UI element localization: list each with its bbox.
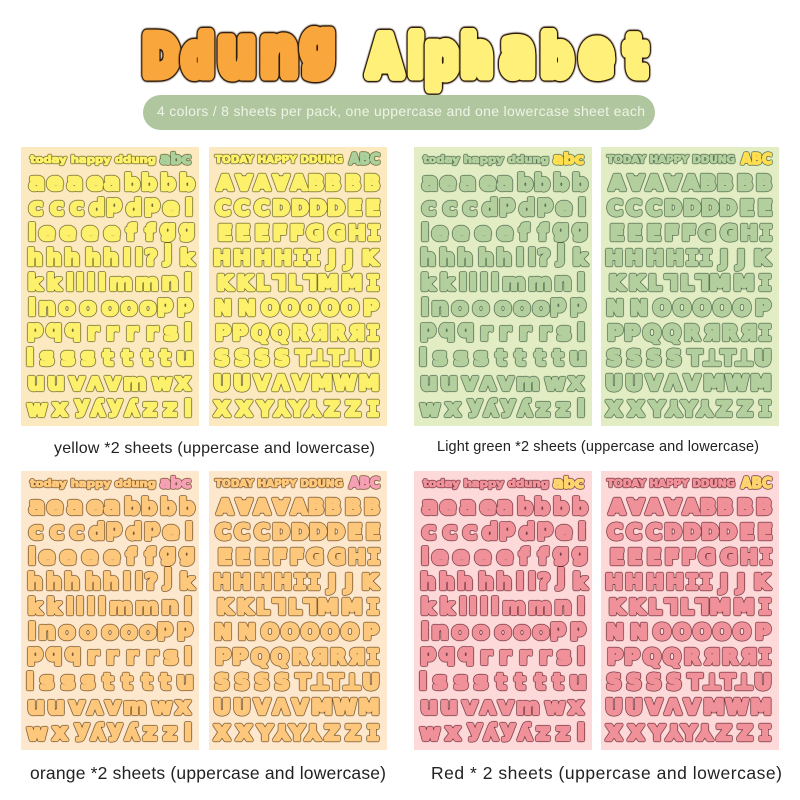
orange uppercase letters: XXY⅄Y⅄ZZ I bbox=[214, 721, 379, 745]
yellow lowercase letters bbox=[26, 150, 195, 422]
orange uppercase letters: CCCDDDDEE bbox=[215, 520, 380, 544]
red lowercase letters: uuvʌvmwx bbox=[420, 692, 584, 720]
green uppercase letters: HHHHII JJK bbox=[605, 246, 771, 270]
red lowercase letters: ieeee ffgg bbox=[421, 541, 588, 570]
yellow uppercase letters: SSSST⊥T⊥U bbox=[215, 346, 379, 370]
green uppercase letters: KKL⅂L⅂MMI bbox=[609, 271, 771, 295]
red uppercase letters: SSSST⊥T⊥U bbox=[607, 670, 771, 694]
orange lowercase letters: ieeee ffgg bbox=[28, 541, 195, 570]
caption: yellow: yellow *2 sheets (uppercase and lowercase) bbox=[54, 440, 375, 457]
yellow uppercase letters: TODAY HAPPY DDUNG bbox=[215, 154, 343, 166]
panel: green uppercase sheet bbox=[601, 147, 779, 426]
orange uppercase letters: TODAY HAPPY DDUNG bbox=[215, 478, 343, 490]
orange uppercase letters: ABC bbox=[349, 474, 380, 492]
title word: Alphabet: a bbox=[501, 18, 535, 90]
orange uppercase letters: NNOOOOOP bbox=[214, 620, 379, 644]
title word: Alphabet: A bbox=[368, 25, 402, 88]
red uppercase letters: EEEFFGGHI bbox=[610, 545, 772, 569]
green lowercase letters: today happy ddung bbox=[423, 154, 549, 166]
title word: Alphabet bbox=[368, 18, 646, 90]
yellow lowercase letters: pqq rrrrs l bbox=[27, 317, 192, 346]
red uppercase letters: HHHHII JJK bbox=[605, 570, 771, 594]
orange lowercase letters: today happy ddung bbox=[30, 478, 156, 490]
title word: Ddung: D bbox=[143, 25, 179, 88]
yellow uppercase letters: ABC bbox=[349, 150, 380, 168]
title word: Ddung: g bbox=[301, 11, 335, 78]
red uppercase letters: TODAY HAPPY DDUNG bbox=[607, 478, 735, 490]
yellow lowercase letters: inooooopp bbox=[28, 292, 193, 321]
green lowercase letters: aeaeabbbb bbox=[422, 168, 588, 196]
green uppercase letters: SSSST⊥T⊥U bbox=[607, 346, 771, 370]
green lowercase letters: inooooopp bbox=[421, 292, 586, 321]
yellow lowercase letters: aeaeabbbb bbox=[29, 168, 195, 196]
orange uppercase letters: SSSST⊥T⊥U bbox=[215, 670, 379, 694]
red uppercase letters: XXY⅄Y⅄ZZ I bbox=[606, 721, 771, 745]
title word: Alphabet: h bbox=[461, 25, 492, 88]
yellow uppercase letters: XXY⅄Y⅄ZZ I bbox=[214, 397, 379, 421]
title word: Ddung bbox=[143, 11, 335, 92]
red lowercase letters: today happy ddung bbox=[423, 478, 549, 490]
panel: red uppercase sheet bbox=[601, 471, 779, 750]
panel: orange uppercase sheet bbox=[209, 471, 387, 750]
title word: Alphabet: p bbox=[425, 23, 459, 90]
yellow uppercase letters: CCCDDDDEE bbox=[215, 196, 380, 220]
orange lowercase letters: hhhhhii?jk bbox=[28, 566, 195, 594]
yellow uppercase letters: KKL⅂L⅂MMI bbox=[217, 271, 379, 295]
panel: yellow uppercase sheet bbox=[209, 147, 387, 426]
green lowercase letters: wx yʎyʎzz i bbox=[420, 393, 585, 422]
panel: green lowercase sheet bbox=[414, 147, 592, 426]
title word: Ddung: u bbox=[218, 15, 256, 92]
yellow uppercase letters bbox=[213, 150, 380, 421]
title word: Ddung: n bbox=[260, 15, 298, 92]
yellow uppercase letters: EEEFFGGHI bbox=[218, 221, 380, 245]
orange lowercase letters: kkllllmmn i bbox=[28, 592, 192, 620]
green lowercase letters bbox=[419, 150, 588, 422]
red uppercase letters: KKL⅂L⅂MMI bbox=[609, 595, 771, 619]
subtitle banner bbox=[143, 95, 655, 130]
green lowercase letters: uuvʌvmwx bbox=[420, 368, 584, 396]
green lowercase letters: ieeee ffgg bbox=[421, 217, 588, 246]
red uppercase letters: ABC bbox=[741, 474, 772, 492]
orange lowercase letters: abc bbox=[160, 474, 191, 492]
orange uppercase letters: A∀A∀ABBBB bbox=[217, 495, 380, 519]
yellow uppercase letters: HHHHII JJK bbox=[213, 246, 379, 270]
orange uppercase letters: KKL⅂L⅂MMI bbox=[217, 595, 379, 619]
yellow lowercase letters: hhhhhii?jk bbox=[28, 242, 195, 270]
red uppercase letters: CCCDDDDEE bbox=[607, 520, 772, 544]
orange lowercase letters: pqq rrrrs l bbox=[27, 641, 192, 670]
yellow lowercase letters: abc bbox=[160, 150, 191, 168]
green uppercase letters: NNOOOOOP bbox=[606, 296, 771, 320]
title word: Alphabet: t bbox=[626, 25, 646, 88]
orange uppercase letters: HHHHII JJK bbox=[213, 570, 379, 594]
red uppercase letters: UUVΛVMWM bbox=[606, 695, 771, 719]
orange uppercase letters: UUVΛVMWM bbox=[214, 695, 379, 719]
red lowercase letters: aeaeabbbb bbox=[422, 492, 588, 520]
orange lowercase letters: ccc dpdpe i bbox=[29, 516, 193, 545]
title word: Alphabet: b bbox=[541, 25, 572, 88]
panel: orange lowercase sheet bbox=[21, 471, 199, 750]
orange uppercase letters: EEEFFGGHI bbox=[218, 545, 380, 569]
green lowercase letters: l sss tttt u bbox=[419, 343, 587, 371]
orange lowercase letters: l sss tttt u bbox=[26, 667, 194, 695]
green lowercase letters: hhhhhii?jk bbox=[421, 242, 588, 270]
red uppercase letters: A∀A∀ABBBB bbox=[609, 495, 772, 519]
green uppercase letters: UUVΛVMWM bbox=[606, 371, 771, 395]
green uppercase letters bbox=[605, 150, 772, 421]
green lowercase letters: ccc dpdpe i bbox=[422, 192, 586, 221]
yellow lowercase letters: l sss tttt u bbox=[26, 343, 194, 371]
green lowercase letters: pqq rrrrs l bbox=[420, 317, 585, 346]
title bbox=[143, 11, 646, 92]
yellow uppercase letters: PPQQRЯRЯI bbox=[215, 321, 379, 345]
caption: red: Red * 2 sheets (uppercase and lowercase) bbox=[431, 763, 782, 783]
red uppercase letters bbox=[605, 474, 772, 745]
green uppercase letters: CCCDDDDEE bbox=[607, 196, 772, 220]
red lowercase letters: hhhhhii?jk bbox=[421, 566, 588, 594]
yellow lowercase letters: ccc dpdpe i bbox=[29, 192, 193, 221]
yellow uppercase letters: UUVΛVMWM bbox=[214, 371, 379, 395]
orange lowercase letters: uuvʌvmwx bbox=[27, 692, 191, 720]
title word: Alphabet: e bbox=[581, 19, 613, 89]
orange lowercase letters bbox=[26, 474, 195, 746]
red lowercase letters: wx yʎyʎzz i bbox=[420, 717, 585, 746]
yellow lowercase letters: kkllllmmn i bbox=[28, 268, 192, 296]
title word: Alphabet: l bbox=[409, 25, 423, 88]
panel: red lowercase sheet bbox=[414, 471, 592, 750]
green lowercase letters: kkllllmmn i bbox=[421, 268, 585, 296]
orange lowercase letters: inooooopp bbox=[28, 616, 193, 645]
red lowercase letters: l sss tttt u bbox=[419, 667, 587, 695]
subtitle banner: 4 colors / 8 sheets per pack, one uppercase and one lowercase sheet each bbox=[157, 103, 645, 119]
red uppercase letters: PPQQRЯRЯI bbox=[607, 645, 771, 669]
orange uppercase letters: PPQQRЯRЯI bbox=[215, 645, 379, 669]
green uppercase letters: A∀A∀ABBBB bbox=[609, 171, 772, 195]
green lowercase letters: abc bbox=[553, 150, 584, 168]
yellow uppercase letters: A∀A∀ABBBB bbox=[217, 171, 380, 195]
green uppercase letters: PPQQRЯRЯI bbox=[607, 321, 771, 345]
yellow lowercase letters: today happy ddung bbox=[30, 154, 156, 166]
caption: light green: Light green *2 sheets (uppercase and lowercase) bbox=[437, 439, 759, 455]
yellow lowercase letters: uuvʌvmwx bbox=[27, 368, 191, 396]
green uppercase letters: XXY⅄Y⅄ZZ I bbox=[606, 397, 771, 421]
panel: yellow lowercase sheet bbox=[21, 147, 199, 426]
red lowercase letters: kkllllmmn i bbox=[421, 592, 585, 620]
orange lowercase letters: wx yʎyʎzz i bbox=[27, 717, 192, 746]
caption: orange: orange *2 sheets (uppercase and lowercase) bbox=[30, 763, 386, 783]
green uppercase letters: TODAY HAPPY DDUNG bbox=[607, 154, 735, 166]
red lowercase letters: inooooopp bbox=[421, 616, 586, 645]
red lowercase letters: abc bbox=[553, 474, 584, 492]
yellow lowercase letters: wx yʎyʎzz i bbox=[27, 393, 192, 422]
green uppercase letters: EEEFFGGHI bbox=[610, 221, 772, 245]
red lowercase letters: ccc dpdpe i bbox=[422, 516, 586, 545]
red lowercase letters bbox=[419, 474, 588, 746]
title word: Ddung: d bbox=[183, 25, 213, 88]
red lowercase letters: pqq rrrrs l bbox=[420, 641, 585, 670]
yellow lowercase letters: ieeee ffgg bbox=[28, 217, 195, 246]
red uppercase letters: NNOOOOOP bbox=[606, 620, 771, 644]
orange lowercase letters: aeaeabbbb bbox=[29, 492, 195, 520]
yellow uppercase letters: NNOOOOOP bbox=[214, 296, 379, 320]
green uppercase letters: ABC bbox=[741, 150, 772, 168]
orange uppercase letters bbox=[213, 474, 380, 745]
